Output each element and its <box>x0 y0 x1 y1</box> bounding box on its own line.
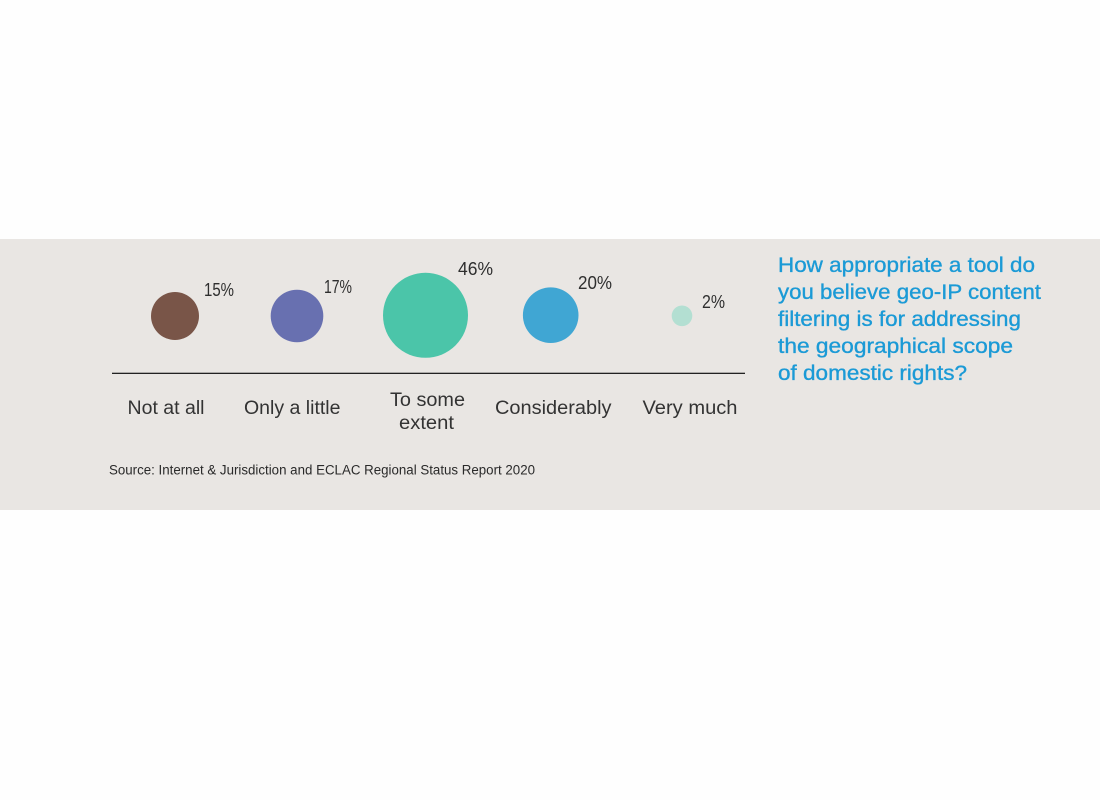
label: To some extent <box>390 390 465 434</box>
question heading: How appropriate a tool do <box>778 254 1035 277</box>
axis line <box>112 373 745 374</box>
bubble: Very much 2%: 2% <box>702 292 725 312</box>
bubble: Considerably 20% <box>523 273 612 343</box>
label: Only a little: Only a little <box>244 398 340 419</box>
question heading: of domestic rights? <box>778 362 967 385</box>
label: Very much: Very much <box>642 398 738 419</box>
label: Considerably: Considerably <box>495 398 612 419</box>
question heading: the geographical scope <box>778 335 1013 358</box>
bubble chart <box>112 259 745 434</box>
bubble: Very much 2% <box>672 292 725 326</box>
bubble: Only a little 17% <box>271 277 352 342</box>
bubble: Not at all 15% <box>151 280 234 340</box>
bubble: Not at all 15%: 15% <box>204 280 234 300</box>
bubble: Considerably 20%: 20% <box>578 273 612 293</box>
question heading: you believe geo-IP content <box>778 281 1041 304</box>
panel: background band <box>0 239 1100 510</box>
bubble: Only a little 17%: 17% <box>324 277 352 297</box>
category labels <box>128 390 738 434</box>
question heading: filtering is for addressing <box>778 308 1021 331</box>
question heading <box>778 254 1041 385</box>
label: To some extent: To some <box>390 390 465 411</box>
bubble: To some extent 46% <box>383 259 493 358</box>
source note: Source: Internet & Jurisdiction and ECLAC Regional Status Report 2020 <box>109 462 535 478</box>
label: To some extent: extent <box>399 413 455 434</box>
label: Not at all: Not at all <box>128 398 204 419</box>
bubble: To some extent 46%: 46% <box>458 259 493 279</box>
